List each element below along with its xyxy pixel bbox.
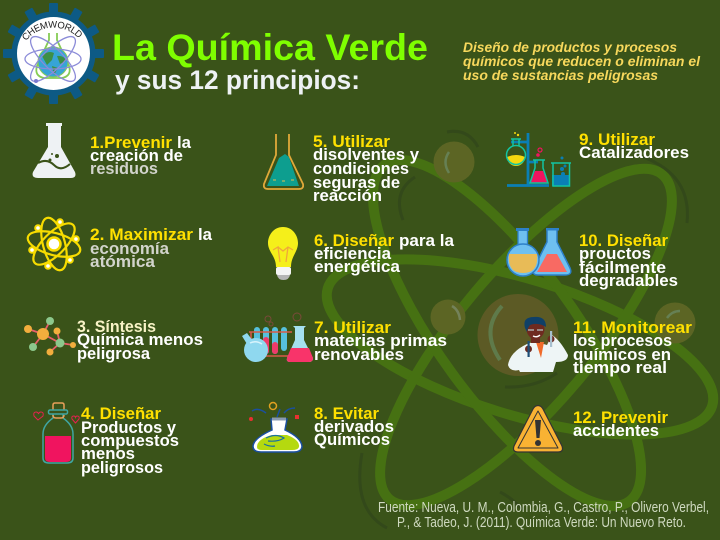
icon: green potion flask — [249, 402, 302, 452]
icon: atom — [25, 215, 83, 273]
icon: two flasks — [507, 228, 571, 276]
principle 1 text: creación de — [90, 146, 183, 165]
principle 3 text: Química menos — [77, 330, 203, 349]
principle 4 text: 4. Diseñar — [81, 404, 161, 423]
principle 5 text: disolventes y — [313, 145, 420, 164]
principle 7 text: renovables — [314, 345, 404, 364]
icon: warning triangle — [514, 406, 562, 452]
principle 5 text: 5. Utilizar — [313, 132, 390, 151]
principle 5 text: condiciones — [313, 159, 409, 178]
principle 9 text — [579, 130, 689, 162]
icon: scientist — [508, 317, 568, 372]
principle 8 text: derivados — [314, 417, 394, 436]
principle 9 text: Catalizadores — [579, 143, 689, 162]
principle 3 text: 3. Síntesis — [77, 317, 156, 336]
principle 6 text: para la — [399, 231, 455, 250]
principle 1 text: residuos — [90, 159, 158, 178]
principle 7 text: 7. Utilizar — [314, 318, 391, 337]
principle 11 text: los procesos — [573, 331, 672, 350]
principle 2 text — [90, 225, 213, 271]
icon: light bulb — [268, 227, 298, 280]
principle 7 text — [314, 318, 447, 364]
principle 6 text: eficiencia — [314, 244, 392, 263]
icon: teal flask — [264, 134, 303, 189]
icon: molecule — [24, 317, 76, 356]
logo: ChemWorld gear: CHEMWORLD — [22, 21, 82, 40]
principle 6 text: energética — [314, 257, 401, 276]
principle 4 text: menos — [81, 444, 135, 463]
principle 9 text: 9. Utilizar — [579, 130, 655, 149]
principle 7 text: materias primas — [314, 331, 447, 350]
principle 4 text: compuestos — [81, 431, 179, 450]
principle 8 text: Químicos — [314, 430, 390, 449]
principle 11 text: químicos en — [573, 345, 671, 364]
principle 10 text: fácilmente — [579, 258, 666, 277]
principle 12 text — [573, 408, 668, 440]
principle 11 text: tiempo real — [573, 358, 667, 377]
logo: ChemWorld gear — [3, 3, 104, 104]
icon: potion bottle with hearts — [34, 403, 79, 463]
subtitle: y sus 12 principios: — [115, 65, 360, 95]
icon: stand with glassware — [506, 132, 571, 186]
principle 2 text: la — [198, 225, 213, 244]
principle 5 text: seguras de — [313, 173, 400, 192]
background bubbles — [360, 131, 696, 528]
principle 10 text: prouctos — [579, 244, 651, 263]
principle 2 text: 2. Maximizar — [90, 225, 193, 244]
principle 4 text: peligrosos — [81, 458, 163, 477]
principle 3 text: peligrosa — [77, 344, 151, 363]
principle 5 text — [313, 132, 420, 205]
principle 2 text: economía — [90, 239, 170, 258]
principle 6 text: 6. Diseñar — [314, 231, 394, 250]
definition text: químicos que reducen o eliminan el — [463, 54, 700, 69]
principle 4 text: Productos y — [81, 418, 177, 437]
definition text: uso de sustancias peligrosas — [463, 68, 659, 83]
principle 1 text: la — [177, 133, 192, 152]
background atom orbits — [308, 125, 720, 540]
principle 1 text: 1.Prevenir — [90, 133, 172, 152]
definition text — [463, 40, 700, 83]
principle 10 text: 10. Diseñar — [579, 231, 668, 250]
principle 10 text — [579, 231, 678, 290]
principle 6 text — [314, 231, 455, 276]
principle 5 text: reacción — [313, 186, 382, 205]
principle 4 text — [81, 404, 179, 477]
principle 12 text: 12. Prevenir — [573, 408, 668, 427]
icon: white flask — [33, 123, 76, 178]
principle 12 text: accidentes — [573, 421, 659, 440]
principle 10 text: degradables — [579, 271, 678, 290]
principle 3 text — [77, 317, 203, 363]
icon: lab glassware — [242, 313, 313, 362]
principle 2 text: atómica — [90, 252, 156, 271]
principle 11 text — [573, 318, 692, 377]
principle 8 text: 8. Evitar — [314, 404, 379, 423]
title: La Química Verde — [112, 27, 428, 68]
principle 1 text — [90, 133, 192, 178]
source citation — [378, 500, 709, 531]
definition text: Diseño de productos y procesos — [463, 40, 678, 55]
principle 8 text — [314, 404, 394, 449]
principle 11 text: 11. Monitorear — [573, 318, 692, 337]
